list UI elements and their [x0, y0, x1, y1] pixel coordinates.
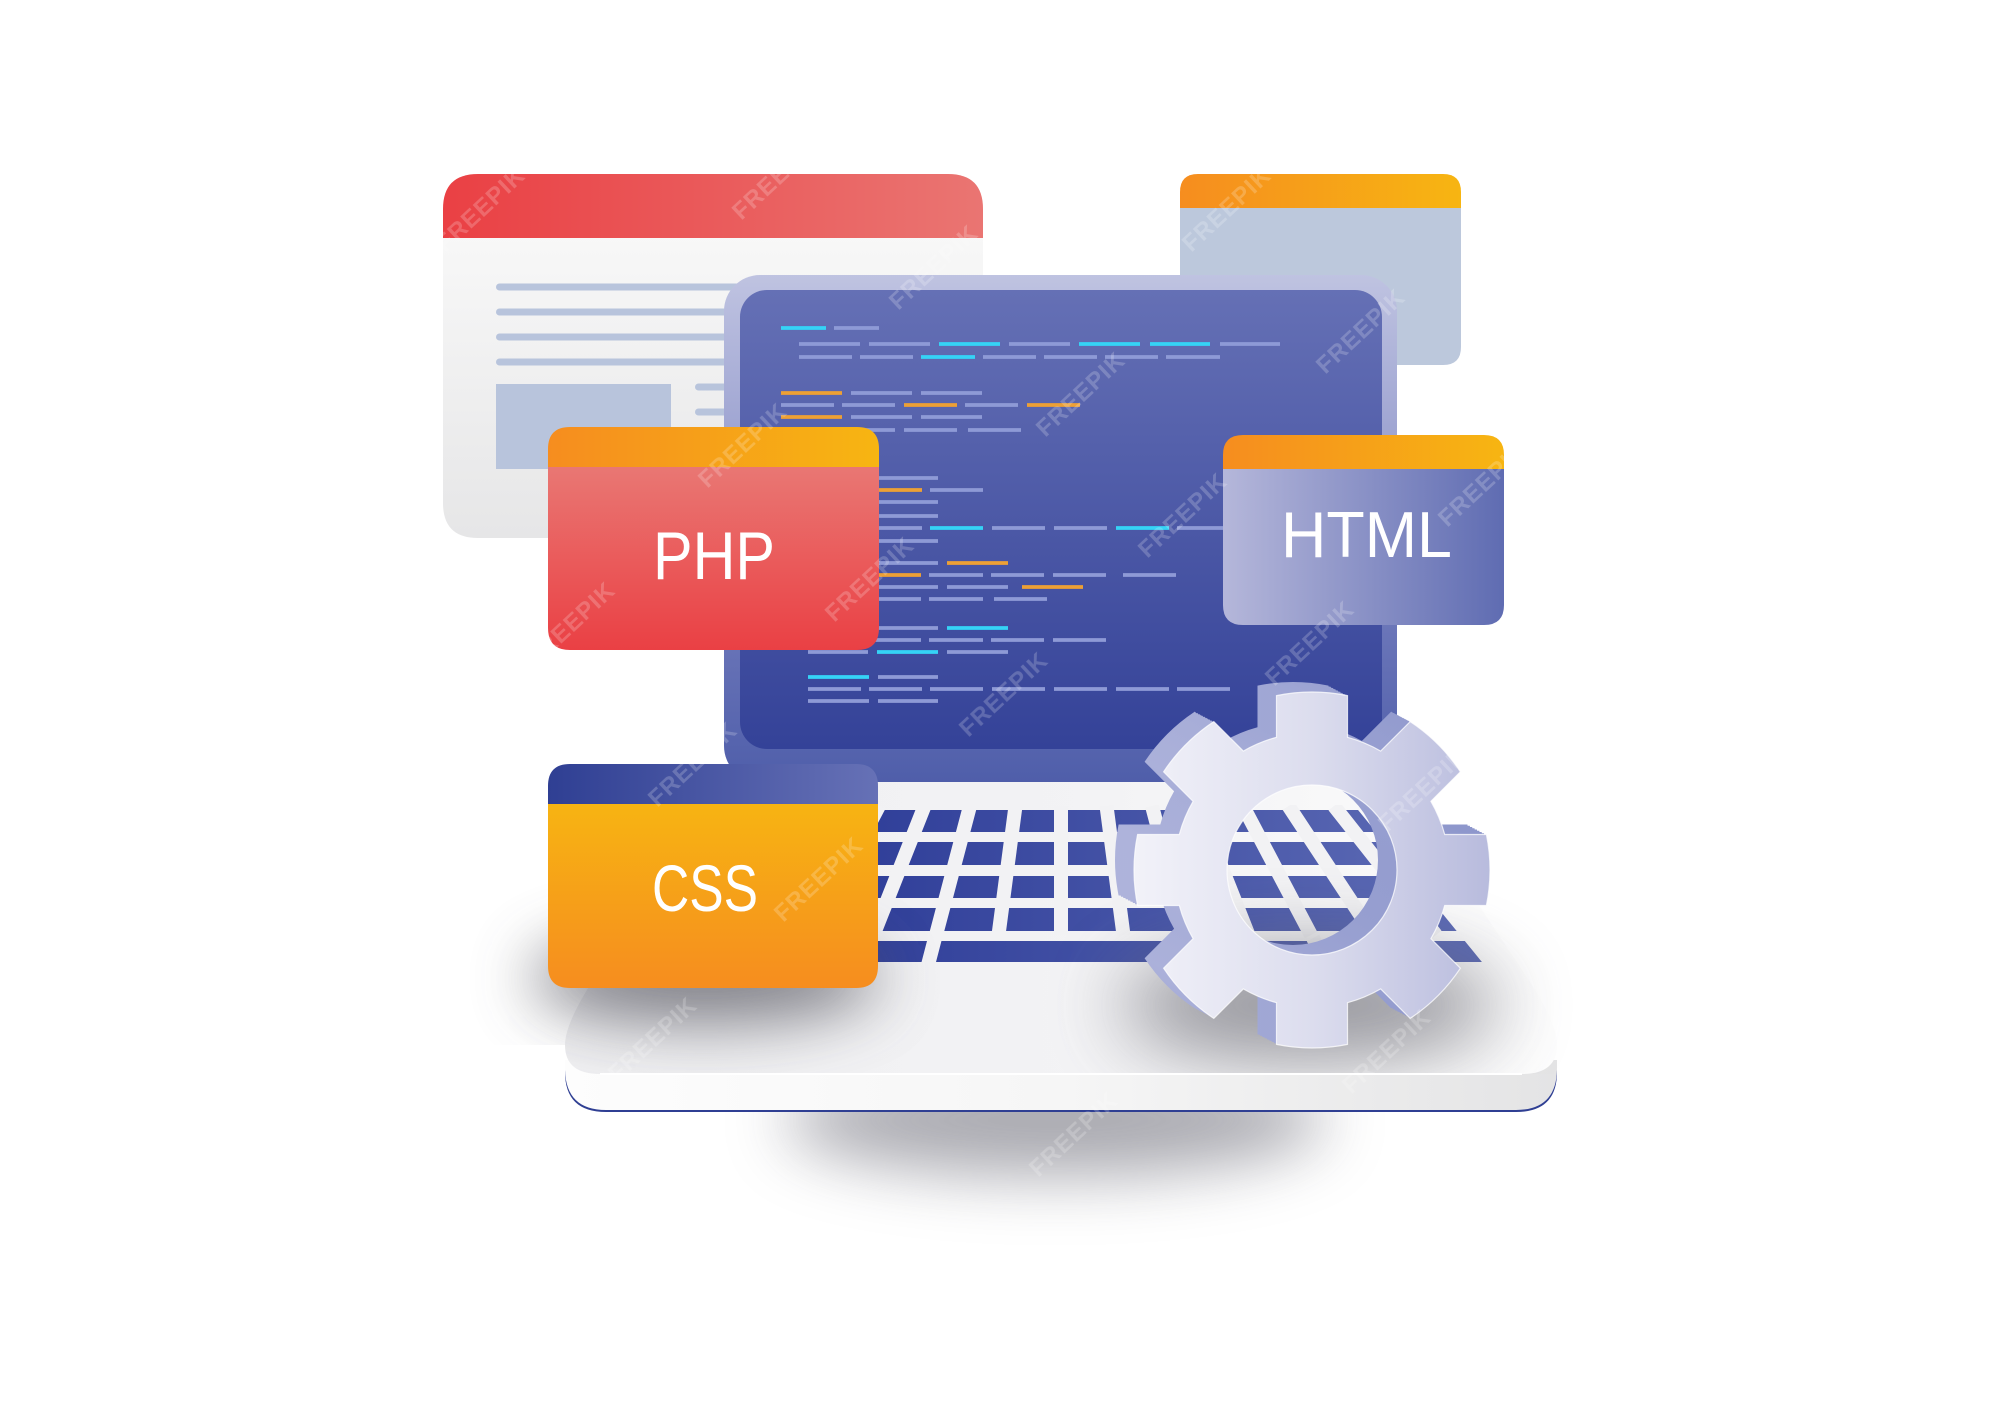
gear shadow on deck: [1120, 950, 1500, 1060]
window header bar: [1180, 174, 1461, 208]
watermark text: FREEPIK: [1260, 596, 1360, 691]
CSS card shadow: [530, 934, 880, 1022]
watermark text: FREEPIK: [820, 532, 920, 627]
watermark text: [431, 130, 1533, 1182]
watermark text: FREEPIK: [1133, 468, 1233, 563]
keyboard: [878, 810, 1482, 962]
deck front edge highlight: [600, 1073, 1522, 1075]
window body: [1180, 200, 1461, 365]
label: PHP: PHP: [653, 518, 775, 594]
watermark text: FREEPIK: [1031, 347, 1131, 442]
card header: [548, 427, 879, 467]
window header bar: [443, 174, 983, 238]
illustration: laptop with code windows and gear: [443, 174, 1557, 1215]
icon: gear: [1115, 682, 1490, 1048]
watermark text: FREEPIK: [1373, 742, 1473, 837]
watermark text: FREEPIK: [521, 577, 621, 672]
screen display: [740, 290, 1382, 749]
code lines: cyan: [781, 328, 1210, 677]
key rows: [878, 810, 1482, 962]
screen bezel: [724, 275, 1397, 782]
base lip face: [565, 1060, 1557, 1110]
card header: [1223, 435, 1504, 469]
watermark text: FREEPIK: [643, 717, 743, 812]
window body: [443, 230, 983, 538]
watermark text: FREEPIK: [603, 992, 703, 1087]
watermark text: FREEPIK: [431, 162, 531, 257]
keyboard deck: [565, 782, 1557, 1074]
watermark text: FREEPIK: [1024, 1087, 1124, 1182]
panel: HTML card: [1223, 435, 1504, 625]
watermark text: FREEPIK: [884, 220, 984, 315]
watermark text: FREEPIK: [1337, 1004, 1437, 1099]
code lines: neutral: [781, 328, 1280, 701]
watermark text: FREEPIK: [769, 832, 869, 927]
card header: [548, 764, 878, 804]
laptop base: [565, 782, 1557, 1112]
watermark text: FREEPIK: [727, 130, 827, 225]
text lines: [496, 284, 776, 416]
image placeholder: [496, 384, 671, 469]
watermark text: FREEPIK: [1311, 284, 1411, 379]
panel: PHP card: [548, 427, 879, 650]
code lines: orange: [781, 393, 1083, 587]
watermark text: FREEPIK: [693, 398, 793, 493]
card body: [548, 798, 878, 988]
panel: blank orange window: [1180, 174, 1461, 365]
watermark text: FREEPIK: [954, 647, 1054, 742]
card body: [548, 460, 879, 650]
panel: CSS card: [548, 764, 878, 988]
gear front face: [1134, 692, 1490, 1048]
watermark text: FREEPIK: [1177, 162, 1277, 257]
gear extrusion: [1115, 682, 1488, 1047]
label: CSS: CSS: [652, 851, 758, 925]
watermark text: FREEPIK: [1433, 437, 1533, 532]
floor shadow under laptop: [785, 1065, 1325, 1175]
laptop screen: [724, 275, 1397, 782]
base lip with blue edge: [565, 1060, 1557, 1112]
panel: red browser window: [443, 174, 983, 538]
label: HTML: HTML: [1281, 498, 1452, 571]
key gaps: [878, 810, 1442, 962]
card body: [1223, 462, 1504, 625]
